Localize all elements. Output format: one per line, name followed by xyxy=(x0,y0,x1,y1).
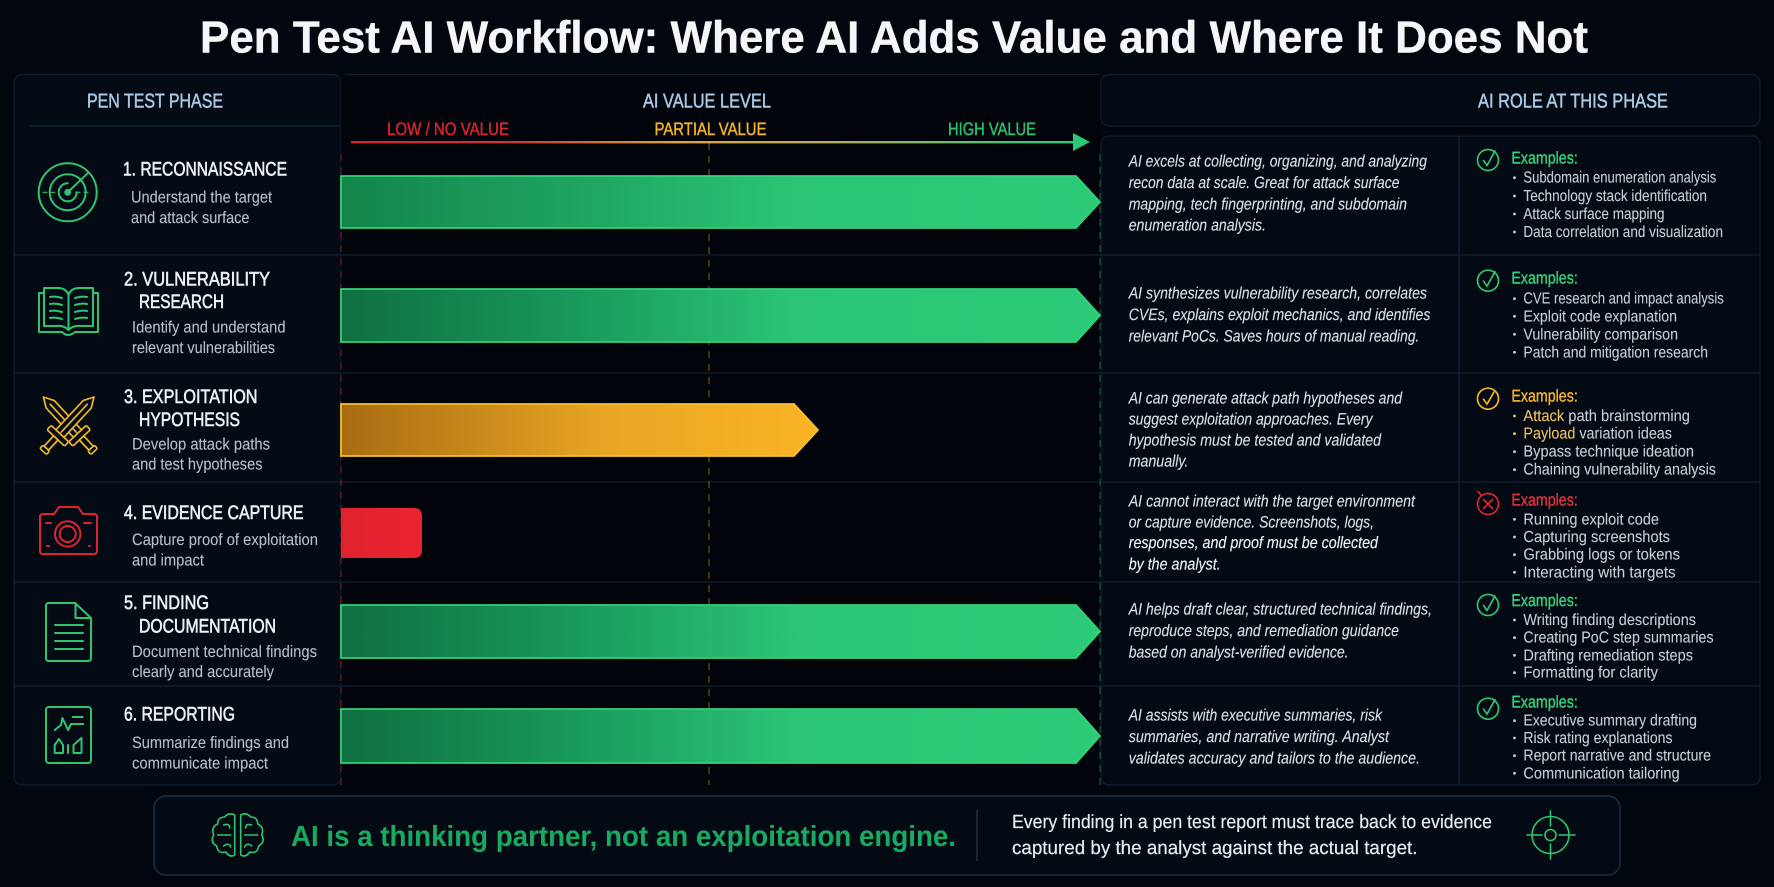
description: reconnaissance: AI excels at collecting, organizing, and analyzing xyxy=(1128,153,1428,171)
bar: finding documentation high value xyxy=(341,605,1100,658)
phase 6 text: Summarize findings and xyxy=(132,734,289,752)
panel: AI role header xyxy=(1101,74,1760,126)
icon: green check 3 xyxy=(1478,594,1498,616)
description: exploitation hypothesis: manually. xyxy=(1129,452,1188,470)
description: vulnerability research: CVEs, explains exploit mechanics, and identifies xyxy=(1129,306,1430,324)
description: finding documentation xyxy=(1128,601,1432,661)
phase 3 text: and test hypotheses xyxy=(132,456,262,474)
icon: report chart xyxy=(46,707,91,763)
examples: finding documentation: Drafting remediation steps xyxy=(1523,647,1693,664)
examples: reconnaissance: Attack surface mapping xyxy=(1523,206,1664,223)
examples: exploitation hypothesis xyxy=(1511,386,1716,479)
examples: finding documentation: Formatting for clarity xyxy=(1523,665,1658,682)
description: reconnaissance xyxy=(1128,153,1428,235)
phase 3 text xyxy=(124,386,270,474)
bar: reporting high value xyxy=(341,709,1100,763)
phase 2 text: RESEARCH xyxy=(139,291,224,313)
phase 4 text xyxy=(124,502,318,570)
examples: reporting: Examples: xyxy=(1511,692,1578,711)
callout body text xyxy=(1012,812,1492,859)
axis label: high: HIGH VALUE xyxy=(948,119,1036,139)
examples: vulnerability research: Vulnerability comparison xyxy=(1523,326,1678,343)
value level guide lines xyxy=(341,143,1100,785)
value axis with arrow xyxy=(351,133,1090,151)
examples: exploitation hypothesis: Payload variation ideas xyxy=(1523,426,1672,443)
phase 6 text xyxy=(124,704,289,773)
phase 4 text: and impact xyxy=(132,552,204,570)
panel: pen test phase background xyxy=(14,74,341,785)
row dividers xyxy=(14,255,1760,686)
icon: green check 4 xyxy=(1478,698,1498,719)
examples: exploitation hypothesis: Chaining vulnerability analysis xyxy=(1523,462,1716,479)
callout body text: Every finding in a pen test report must trace back to evidence xyxy=(1012,812,1492,833)
icon: camera xyxy=(40,507,97,554)
phase 5 text: DOCUMENTATION xyxy=(139,616,276,638)
phase 6 text: communicate impact xyxy=(132,755,268,773)
icon: crossed swords xyxy=(34,389,103,460)
column heading: AI value level: AI VALUE LEVEL xyxy=(643,91,771,113)
description: reporting: AI assists with executive summaries, risk xyxy=(1128,707,1383,725)
callout headline: AI is a thinking partner, not an exploitation engine. xyxy=(291,821,956,853)
bar: exploitation hypothesis partial value xyxy=(341,404,818,456)
examples: vulnerability research xyxy=(1511,269,1724,361)
examples: evidence capture: Interacting with targets xyxy=(1523,564,1676,581)
panel: AI role body xyxy=(1101,136,1760,785)
examples: finding documentation: Writing finding descriptions xyxy=(1523,612,1696,629)
phase 1 text: and attack surface xyxy=(131,209,250,227)
phase 5 text: Document technical findings xyxy=(132,643,317,661)
description: exploitation hypothesis: suggest exploitation approaches. Every xyxy=(1129,410,1374,428)
phase 2 text: relevant vulnerabilities xyxy=(132,339,275,357)
callout divider xyxy=(976,810,978,861)
phase 5 text xyxy=(124,592,317,681)
examples: finding documentation: Examples: xyxy=(1511,591,1578,610)
examples: vulnerability research: CVE research and impact analysis xyxy=(1523,291,1724,308)
title: Pen Test AI Workflow: Where AI Adds Value and Where It Does Not xyxy=(200,12,1588,62)
description: exploitation hypothesis xyxy=(1128,389,1403,470)
icon: brain xyxy=(212,814,263,856)
examples: reconnaissance: Data correlation and visualization xyxy=(1523,224,1723,241)
phase 1 text: Understand the target xyxy=(131,189,272,207)
description: evidence capture: AI cannot interact with the target environment xyxy=(1128,493,1416,511)
description: reconnaissance: enumeration analysis. xyxy=(1129,217,1266,235)
examples: vulnerability research: Examples: xyxy=(1511,269,1578,288)
examples: reconnaissance: Subdomain enumeration analysis xyxy=(1523,170,1716,187)
description: vulnerability research xyxy=(1128,285,1430,345)
description: reporting: summaries, and narrative writing. Analyst xyxy=(1129,728,1390,746)
examples: vulnerability research: Patch and mitigation research xyxy=(1523,344,1708,361)
icon: green check 1 xyxy=(1478,150,1498,170)
examples: finding documentation xyxy=(1511,591,1714,682)
description: vulnerability research: AI synthesizes vulnerability research, correlates xyxy=(1128,285,1427,303)
phase 4 text: 4. EVIDENCE CAPTURE xyxy=(124,502,304,524)
column heading: pen test phase: PEN TEST PHASE xyxy=(87,91,223,113)
examples: evidence capture: Running exploit code xyxy=(1523,511,1659,528)
phase 2 text: 2. VULNERABILITY xyxy=(124,269,270,291)
examples: evidence capture: Examples: xyxy=(1511,490,1578,509)
examples: reporting: Communication tailoring xyxy=(1523,765,1680,782)
phase 4 text: Capture proof of exploitation xyxy=(132,531,318,549)
description: vulnerability research: relevant PoCs. Saves hours of manual reading. xyxy=(1129,327,1419,345)
icon: amber check xyxy=(1478,388,1498,409)
phase 2 text xyxy=(124,269,286,357)
examples: finding documentation: Creating PoC step summaries xyxy=(1523,630,1714,647)
callout: footer xyxy=(154,796,1620,875)
bar: reconnaissance high value xyxy=(341,176,1100,228)
phase 1 text: 1. RECONNAISSANCE xyxy=(123,159,287,181)
description: reporting: validates accuracy and tailors to the audience. xyxy=(1129,749,1420,767)
examples: evidence capture: Grabbing logs or tokens xyxy=(1523,547,1680,564)
phase 3 text: HYPOTHESIS xyxy=(139,409,240,431)
examples: reporting xyxy=(1511,692,1711,782)
examples: exploitation hypothesis: Examples: xyxy=(1511,386,1578,405)
examples: reporting: Report narrative and structure xyxy=(1523,748,1711,765)
examples: vulnerability research: Exploit code explanation xyxy=(1523,308,1677,325)
description: exploitation hypothesis: AI can generate attack path hypotheses and xyxy=(1128,389,1403,407)
description: finding documentation: based on analyst-verified evidence. xyxy=(1129,643,1349,661)
phase 6 text: 6. REPORTING xyxy=(124,704,235,726)
icon: green check 2 xyxy=(1478,270,1498,291)
examples: reconnaissance xyxy=(1511,148,1723,241)
examples: evidence capture xyxy=(1511,490,1680,581)
phase 3 text: Develop attack paths xyxy=(132,436,270,454)
icon: open book xyxy=(39,288,98,335)
description: reconnaissance: mapping, tech fingerprinting, and subdomain xyxy=(1129,195,1407,213)
axis label: partial: PARTIAL VALUE xyxy=(654,119,766,139)
callout body text: captured by the analyst against the actual target. xyxy=(1012,838,1418,859)
bar: vulnerability research high value xyxy=(341,289,1100,342)
description: finding documentation: reproduce steps, and remediation guidance xyxy=(1129,622,1399,640)
panel: AI value level background xyxy=(341,74,1101,785)
examples: reconnaissance: Examples: xyxy=(1511,148,1578,167)
description: evidence capture xyxy=(1128,493,1416,573)
examples: exploitation hypothesis: Bypass technique ideation xyxy=(1523,444,1694,461)
examples: reporting: Executive summary drafting xyxy=(1523,713,1697,730)
icon: document xyxy=(46,603,91,661)
description: evidence capture: or capture evidence. Screenshots, logs, xyxy=(1129,513,1374,531)
examples: evidence capture: Capturing screenshots xyxy=(1523,529,1670,546)
icon: red cross xyxy=(1478,492,1498,514)
icon: target crosshair xyxy=(1527,811,1575,859)
description: reconnaissance: recon data at scale. Great for attack surface xyxy=(1129,174,1400,192)
examples: reporting: Risk rating explanations xyxy=(1523,730,1672,747)
axis label: low: LOW / NO VALUE xyxy=(387,119,509,139)
column heading: AI role: AI ROLE AT THIS PHASE xyxy=(1478,91,1668,113)
phase 2 text: Identify and understand xyxy=(132,319,286,337)
icon: radar xyxy=(39,163,97,221)
phase 1 text xyxy=(123,159,287,227)
description: evidence capture: responses, and proof must be collected xyxy=(1129,534,1379,552)
examples: reconnaissance: Technology stack identification xyxy=(1523,188,1707,205)
description: reporting xyxy=(1128,707,1420,767)
phase 5 text: clearly and accurately xyxy=(132,663,275,681)
description: exploitation hypothesis: hypothesis must be tested and validated xyxy=(1129,431,1382,449)
description: evidence capture: by the analyst. xyxy=(1129,555,1221,573)
phase 5 text: 5. FINDING xyxy=(124,592,209,614)
examples: exploitation hypothesis: Attack path brainstorming xyxy=(1523,408,1690,425)
description: finding documentation: AI helps draft clear, structured technical findings, xyxy=(1128,601,1432,619)
bar: evidence capture low value xyxy=(341,508,422,558)
phase 3 text: 3. EXPLOITATION xyxy=(124,386,258,408)
